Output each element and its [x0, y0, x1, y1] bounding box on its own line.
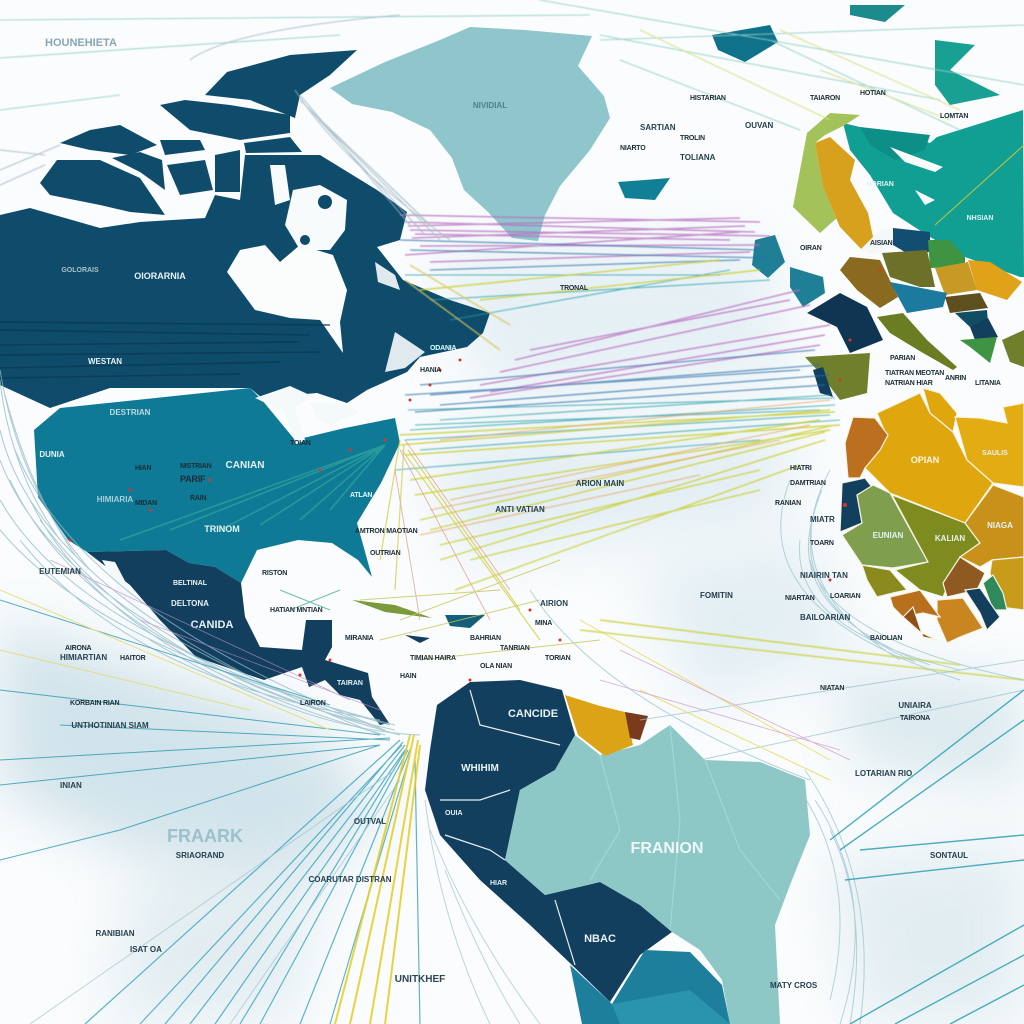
- coastal label clutter: BAHRIAN: [470, 635, 501, 642]
- coastal label clutter: AISIAN: [870, 240, 893, 247]
- coastal label clutter: TANRIAN: [500, 645, 530, 652]
- map: United States: DUNIA: [39, 450, 65, 459]
- map: Northwest South America: HIAR: [490, 880, 507, 887]
- coastal label clutter: MIRANIA: [345, 635, 374, 642]
- map: Northwest South America: WHIHIM: [461, 763, 499, 774]
- coastal label clutter: HANIA: [420, 367, 441, 374]
- ocean labels: SARTIAN: [640, 123, 676, 132]
- coastal label clutter: RANIAN: [775, 500, 801, 507]
- route lines: Atlantic south and east arcs: [530, 470, 1024, 1024]
- map: Southern Cone: [570, 950, 730, 1024]
- coastal label clutter: PARIAN: [890, 355, 915, 362]
- ocean labels: MIATR: [810, 515, 835, 524]
- coastal label clutter: KORBAIN RIAN: [70, 700, 119, 707]
- ocean labels: TOLIANA: [680, 153, 716, 162]
- coastal label clutter: LOARIAN: [830, 593, 861, 600]
- map: Venezuela and Guianas: [565, 695, 648, 756]
- ocean labels: LOTARIAN RIO: [855, 769, 912, 778]
- map: Russia and Arctic Europe: [618, 5, 1024, 277]
- ocean labels: RANIBIAN: [95, 929, 135, 938]
- coastal label clutter: TIATRAN MEOTAN: [885, 370, 944, 377]
- coastal label clutter: HISTARIAN: [690, 95, 726, 102]
- ocean labels: BAILOARIAN: [800, 613, 850, 622]
- coastal label clutter: NATRIAN HIAR: [885, 380, 933, 387]
- map: Brazil: FRANION: [631, 840, 703, 857]
- map: United States: NISTRIAN: [180, 463, 212, 470]
- ocean labels: OUVAN: [745, 121, 774, 130]
- map: United States: RAIN: [190, 495, 206, 502]
- ocean labels: COARUTAR DISTRAN: [309, 875, 392, 884]
- Arctic islands: [40, 50, 357, 215]
- map: Africa: NIAGA: [987, 521, 1013, 530]
- coastal label clutter: MINA: [535, 620, 552, 627]
- map: United States: [34, 386, 400, 583]
- map: Canada and Alaska: WESTAN: [88, 357, 122, 366]
- map: United States: HIAN: [135, 465, 151, 472]
- coastal label clutter: TORIAN: [545, 655, 571, 662]
- map: Northwest South America: CANCIDE: [508, 708, 558, 720]
- map: Mexico and Central America: CANIDA: [191, 619, 233, 631]
- ocean labels: FOMITIN: [700, 591, 733, 600]
- Great Lakes: [255, 386, 312, 445]
- coastal label clutter: TIMIAN HAIRA: [410, 655, 456, 662]
- ocean labels: FRAARK: [167, 826, 243, 846]
- map: Europe: [752, 228, 1024, 400]
- map: Mexico and Central America: TAIRAN: [337, 680, 363, 687]
- coastal label clutter: NIARTAN: [785, 595, 815, 602]
- map: Scandinavia: [793, 113, 873, 250]
- ocean labels: EUTEMIAN: [39, 567, 81, 576]
- ocean labels: MATY CROS: [770, 981, 818, 990]
- ocean labels: NIAIRIN TAN: [800, 571, 848, 580]
- map: Northwest South America: OUIA: [445, 810, 462, 817]
- coastal label clutter: RISTON: [262, 570, 287, 577]
- coastal label clutter: OLA NIAN: [480, 663, 512, 670]
- Baja sliver: [102, 560, 157, 632]
- ocean labels: SRIAORAND: [176, 851, 224, 860]
- coastal label clutter: HIATRI: [790, 465, 812, 472]
- map: United States: MIDAN: [135, 500, 157, 507]
- ocean labels: SONTAUL: [930, 851, 968, 860]
- route lines: fan to South Pacific: [30, 735, 540, 1024]
- coastal label clutter: LOMTAN: [940, 113, 968, 120]
- ocean labels: UNTHOTINIAN SIAM: [71, 721, 149, 730]
- map: Mexico and Central America: BELTINAL: [173, 580, 208, 587]
- map: Russia and Arctic Europe: NORIAN: [866, 181, 894, 188]
- map: Greenland: NIVIDIAL: [473, 101, 507, 110]
- map: Northwest South America: [425, 680, 672, 1002]
- coastal label clutter: NIARTO: [620, 145, 646, 152]
- ocean labels: ISAT OA: [130, 945, 162, 954]
- map: Africa: KALIAN: [935, 534, 965, 543]
- route lines: coastal bundle down US East: [280, 440, 600, 660]
- map: Africa: EUNIAN: [873, 531, 904, 540]
- Baffin lakes and coastal ice: [300, 195, 332, 245]
- map: United States: HIMIARIA: [97, 495, 133, 504]
- ocean labels: UNIAIRA: [898, 701, 932, 710]
- coastal label clutter: TROLIN: [680, 135, 705, 142]
- ocean labels: INIAN: [60, 781, 82, 790]
- coastal label clutter: [65, 90, 1001, 722]
- map: United States: PARIF: [180, 474, 206, 484]
- map: United States: TRINOM: [204, 524, 240, 534]
- ocean labels: UNITKHEF: [395, 974, 445, 985]
- map: Brazil: [505, 725, 810, 1024]
- map: Northwest South America: NBAC: [584, 933, 616, 945]
- ocean labels: OUTVAL: [354, 817, 386, 826]
- coastal label clutter: DAMTRIAN: [790, 480, 826, 487]
- Foxe Basin: [285, 185, 347, 250]
- coastal label clutter: BAIOLIAN: [870, 635, 902, 642]
- coastal label clutter: OUTRIAN: [370, 550, 401, 557]
- coastal label clutter: TOARN: [810, 540, 834, 547]
- map: Mexico and Central America: [87, 550, 485, 725]
- ocean labels: ARION MAIN: [576, 479, 624, 488]
- coastal label clutter: HAIN: [400, 673, 416, 680]
- coastal label clutter: LITANIA: [975, 380, 1001, 387]
- ocean labels: AIRION: [540, 599, 568, 608]
- ocean labels: ANTI VATIAN: [495, 505, 545, 514]
- route lines: Pacific arcs: [0, 370, 420, 860]
- ocean labels: HIMIARTIAN: [60, 653, 107, 662]
- coastal label clutter: HATIAN MNTIAN: [270, 607, 323, 614]
- map: United States: ATLAN: [350, 492, 372, 499]
- coastal label clutter: LAIRON: [300, 700, 326, 707]
- map: Africa: OPIAN: [911, 455, 939, 465]
- coastal label clutter: TRONAL: [560, 285, 589, 292]
- Hudson Bay: [227, 245, 347, 353]
- city markers: [68, 268, 882, 682]
- map: United States: DESTRIAN: [110, 408, 151, 417]
- route lines: lower right: [830, 690, 1024, 1024]
- coastal label clutter: ODANIA: [430, 345, 457, 352]
- ocean labels: HOUNEHIETA: [45, 37, 117, 49]
- map: Canada and Alaska: OIORARNIA: [134, 271, 186, 281]
- coastal label clutter: TAIRONA: [900, 715, 930, 722]
- route lines: transatlantic: [0, 0, 1024, 680]
- coastal label clutter: TAIARON: [810, 95, 840, 102]
- coastal label clutter: AIRONA: [65, 645, 92, 652]
- radial cable rays: [120, 445, 385, 540]
- map: Mexico and Central America: DELTONA: [171, 599, 209, 608]
- map: Canada and Alaska: GOLORAIS: [61, 267, 99, 274]
- map: Africa: [840, 388, 1024, 643]
- map: Africa: SAULIS: [982, 450, 1008, 457]
- coastal label clutter: OIRAN: [800, 245, 822, 252]
- coastal label clutter: NIATAN: [820, 685, 844, 692]
- coastal label clutter: HAITOR: [120, 655, 146, 662]
- coastal label clutter: AMTRON MAOTIAN: [355, 528, 418, 535]
- map: Canada and Alaska: [0, 50, 490, 408]
- map: United States: CANIAN: [226, 460, 264, 471]
- Canada cable streaks: [0, 322, 330, 378]
- coastal label clutter: ANRIN: [945, 375, 966, 382]
- map: Greenland: [330, 27, 610, 241]
- coastal label clutter: HOTIAN: [860, 90, 886, 97]
- map: United States: TOIAN: [290, 440, 311, 447]
- map: Russia and Arctic Europe: NHSIAN: [967, 215, 993, 222]
